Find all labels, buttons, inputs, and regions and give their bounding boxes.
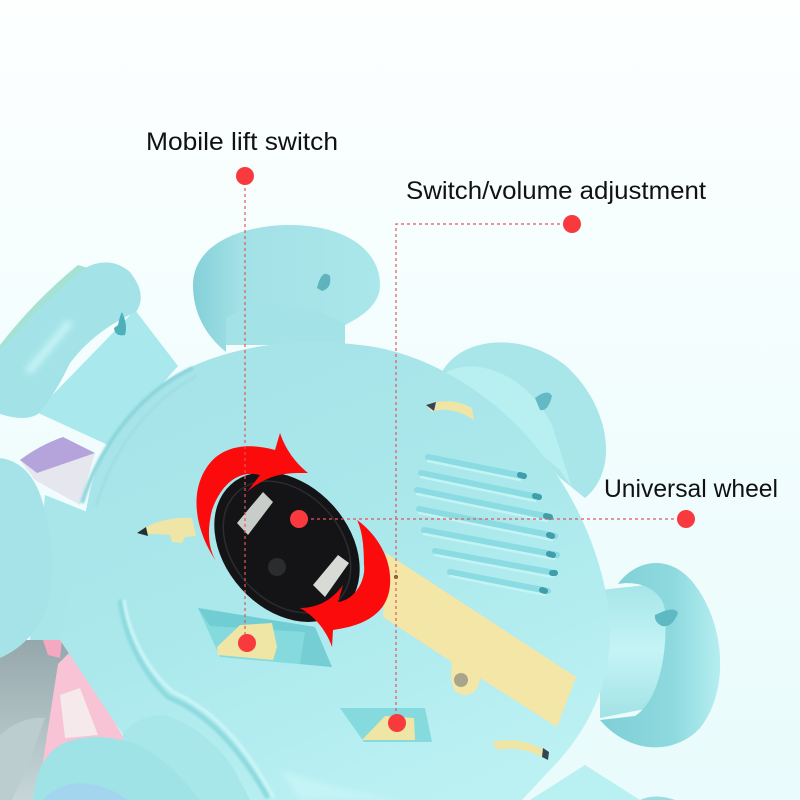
leader line: switch/volume adjustment <box>396 224 572 723</box>
slot window: lift switch <box>198 608 332 667</box>
red rotation arrow: top <box>197 433 308 561</box>
slot window: bottom switch <box>340 708 432 742</box>
caster roller: lower <box>313 555 349 597</box>
wheel: top right <box>442 342 606 498</box>
leader line: universal wheel <box>299 518 686 520</box>
side slot: bottom right <box>492 740 549 760</box>
black wheel housing <box>185 443 389 651</box>
label: switch/volume adjustment: Switch/volume adjustment <box>406 177 706 205</box>
side slot: left <box>137 518 196 543</box>
wheel: left <box>0 458 130 658</box>
wheel: bottom left <box>33 715 250 800</box>
label: mobile lift switch: Mobile lift switch <box>146 128 338 156</box>
wheel: top left <box>0 262 178 445</box>
marker dots <box>236 167 695 732</box>
caster roller: upper <box>237 492 273 535</box>
main body disc <box>60 342 610 800</box>
yellow label strip <box>383 553 576 727</box>
wheel: bottom far right <box>530 765 675 800</box>
red rotation arrow: bottom <box>300 520 390 647</box>
toy parts behind body <box>0 437 130 800</box>
side slot: top right <box>426 401 474 420</box>
label: universal wheel: Universal wheel <box>604 475 778 503</box>
wheel: bottom right <box>600 563 720 747</box>
speaker grille <box>417 457 557 595</box>
leader line: mobile lift switch <box>244 176 246 643</box>
wheel: top <box>193 225 380 352</box>
